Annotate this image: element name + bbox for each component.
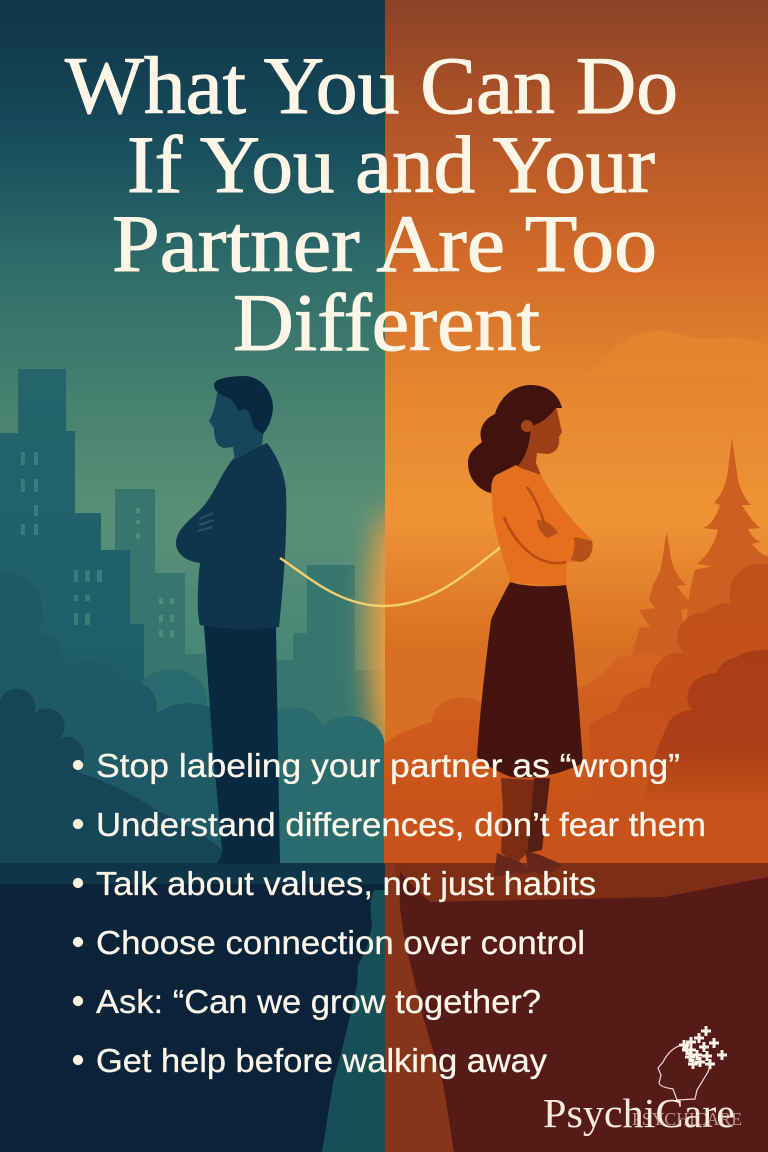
logo xyxy=(543,1026,742,1136)
forest trees xyxy=(630,438,768,660)
connecting thread xyxy=(280,547,501,606)
logo small wordmark: PSYCHICARE xyxy=(632,1109,742,1129)
bullet list xyxy=(73,747,706,1079)
man hand xyxy=(198,513,214,531)
background: teal city half xyxy=(0,0,385,864)
orange rock xyxy=(385,863,454,1152)
woman ear xyxy=(521,420,533,432)
bullet 4: Choose connection over control xyxy=(96,924,585,961)
title line 2: If You and Your xyxy=(127,119,655,210)
woman skirt xyxy=(477,582,583,778)
bullet 6: Get help before walking away xyxy=(96,1042,548,1079)
rear buildings xyxy=(115,489,384,760)
bullet 2: Understand differences, don’t fear them xyxy=(96,806,706,843)
teal hills xyxy=(0,572,385,865)
woman hair xyxy=(468,385,562,493)
red ground xyxy=(385,863,768,1152)
tower windows xyxy=(21,452,102,625)
woman forearm xyxy=(571,537,593,562)
bullet 3: Talk about values, not just habits xyxy=(96,865,596,902)
teal rock xyxy=(322,890,385,1152)
woman top xyxy=(491,465,593,585)
middle hill xyxy=(0,572,234,865)
woman neck and face xyxy=(517,405,562,475)
middle hill xyxy=(590,564,768,864)
bullet dots xyxy=(73,760,83,1065)
bullet 5: Ask: “Can we grow together? xyxy=(96,983,541,1020)
city skyline xyxy=(0,369,384,760)
orange hills xyxy=(384,564,768,864)
near hill xyxy=(640,650,768,864)
title line 1: What You Can Do xyxy=(65,40,678,131)
title line 4: Different xyxy=(233,277,540,368)
cloud behind forest xyxy=(582,331,768,378)
man legs xyxy=(204,626,280,864)
tall pine xyxy=(684,438,768,640)
small pine xyxy=(630,533,696,660)
teal ground xyxy=(0,863,385,1152)
woman hand xyxy=(537,520,558,538)
man face xyxy=(209,393,265,460)
logo wordmark: PsychiCare xyxy=(543,1090,735,1136)
woman shoes xyxy=(494,850,563,876)
man hair xyxy=(214,376,273,434)
dark ridge xyxy=(400,870,768,1152)
seam glow xyxy=(346,497,385,744)
title xyxy=(65,40,678,368)
near hill xyxy=(0,689,222,865)
title line 3: Partner Are Too xyxy=(112,198,657,289)
side building windows xyxy=(136,508,174,637)
woman front leg xyxy=(501,778,534,863)
teal ground upper strip xyxy=(0,863,385,884)
far hill xyxy=(120,669,385,865)
ground band xyxy=(0,863,768,1152)
logo head outline xyxy=(658,1045,711,1100)
far hill xyxy=(384,653,768,864)
front tower xyxy=(0,369,144,740)
man silhouette xyxy=(176,376,286,864)
background: orange forest half xyxy=(385,0,768,864)
woman back leg xyxy=(527,778,550,853)
woman figure xyxy=(468,385,593,876)
bullet 1: Stop labeling your partner as “wrong” xyxy=(96,747,680,784)
woman arm crease xyxy=(504,487,566,563)
logo crosses xyxy=(679,1026,727,1069)
man suit xyxy=(176,443,286,629)
